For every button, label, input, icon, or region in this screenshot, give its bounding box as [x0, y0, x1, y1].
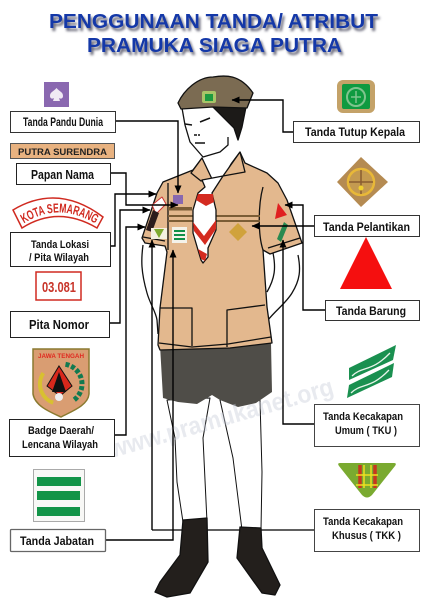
icon: tanda barung triangle [340, 237, 392, 289]
icon: pita wilayah small [152, 197, 166, 214]
label: tanda tutup kepala [294, 122, 420, 142]
icon: tanda jabatan [34, 470, 84, 522]
hair [213, 107, 246, 140]
label: tanda barung [326, 300, 420, 320]
icon: nomor 03.081 [36, 272, 81, 300]
label: tkk: Khusus ( TKK ) [332, 530, 401, 542]
chest band [168, 216, 260, 221]
label: tanda pelantikan: Tanda Pelantikan [323, 220, 410, 234]
label: papan nama: Papan Nama [31, 167, 95, 182]
icon: pandu dunia small [173, 195, 183, 204]
icon: kota semarang arc: KOTA SEMARANG [20, 204, 98, 224]
badges on the shirt [146, 91, 288, 243]
label: badge daerah: Badge Daerah/ [28, 425, 94, 437]
icon: barung small [275, 203, 287, 219]
legs [167, 398, 262, 530]
arrow: papan nama [110, 173, 178, 205]
icon: badge daerah: JAWA TENGAH [38, 354, 84, 360]
icon: daerah small [146, 210, 159, 232]
arrow: tanda jabatan [105, 250, 173, 540]
icon: tku [347, 345, 396, 398]
shorts [160, 343, 272, 407]
label: tanda tutup kepala: Tanda Tutup Kepala [305, 125, 405, 139]
name plate [10, 144, 114, 158]
label: tanda jabatan: Tanda Jabatan [20, 534, 94, 548]
watermark: www.pramukanet.org [105, 373, 337, 464]
title: PRAMUKA SIAGA PUTRA [87, 35, 342, 57]
label: tku: Umum ( TKU ) [335, 425, 397, 437]
collar [191, 152, 245, 181]
label: tanda barung: Tanda Barung [336, 304, 406, 318]
label: tanda lokasi: Tanda Lokasi [31, 239, 89, 251]
label: tkk: Tanda Kecakapan [323, 516, 403, 528]
icon: hat badge [202, 91, 216, 103]
icon: tanda pelantikan diamond [337, 157, 388, 207]
label: pita nomor: Pita Nomor [29, 317, 89, 332]
arrow: pelantikan [252, 225, 314, 227]
arrow: pita nomor [109, 210, 150, 323]
connector lines [105, 100, 325, 540]
label: tanda jabatan [10, 530, 106, 552]
label: badge daerah: Lencana Wilayah [22, 439, 98, 451]
label: tanda pelantikan [314, 216, 420, 236]
line: tkk lower run behind the socks [152, 529, 314, 531]
icon: nomor 03.081: 03.081 [42, 279, 76, 296]
icon: tku small [277, 222, 288, 242]
shirt details [143, 183, 300, 347]
icon: tkk small [151, 228, 167, 239]
icon: jabatan small [172, 227, 187, 243]
label: tanda lokasi: / Pita Wilayah [29, 252, 89, 264]
label: pita nomor [10, 312, 110, 338]
icon: tkk [338, 463, 396, 498]
socks [155, 518, 280, 597]
arms [142, 245, 300, 334]
name plate: PUTRA SURENDRA [18, 147, 107, 158]
title: PENGGUNAAN TANDA/ ATRIBUT [51, 14, 380, 36]
icon: pandu dunia [44, 82, 69, 107]
label: papan nama [16, 164, 110, 184]
neckerchief [193, 176, 223, 263]
label: tku: Tanda Kecakapan [323, 411, 403, 423]
hat [178, 76, 253, 109]
neck and face [182, 107, 246, 176]
white neck opening [204, 150, 236, 180]
label: tanda pandu dunia [10, 112, 116, 132]
shirt [142, 152, 302, 350]
title [49, 11, 380, 60]
icon: tutup kepala [337, 80, 375, 113]
arrow: tutup kepala [232, 100, 293, 132]
arrow: pita wilayah [110, 194, 156, 246]
eyes and mouth [185, 118, 210, 143]
icon: diamond small [229, 223, 247, 241]
label: tkk [314, 510, 420, 552]
label: tanda lokasi [10, 232, 110, 266]
arrow: pandu dunia [116, 121, 178, 193]
icon: name bar small [168, 207, 192, 210]
label: tanda pandu dunia: Tanda Pandu Dunia [23, 115, 103, 129]
title: PENGGUNAAN TANDA/ ATRIBUT [49, 11, 378, 33]
title: PRAMUKA SIAGA PUTRA [89, 38, 344, 60]
arrow: barung [285, 205, 325, 310]
label: badge daerah [10, 420, 114, 456]
arrow: badge daerah [114, 227, 145, 435]
scout figure [142, 76, 302, 597]
arrow: tkk [151, 240, 153, 530]
icon: badge daerah [33, 349, 89, 417]
label: tku [314, 404, 420, 446]
arrow: tku [283, 240, 314, 424]
